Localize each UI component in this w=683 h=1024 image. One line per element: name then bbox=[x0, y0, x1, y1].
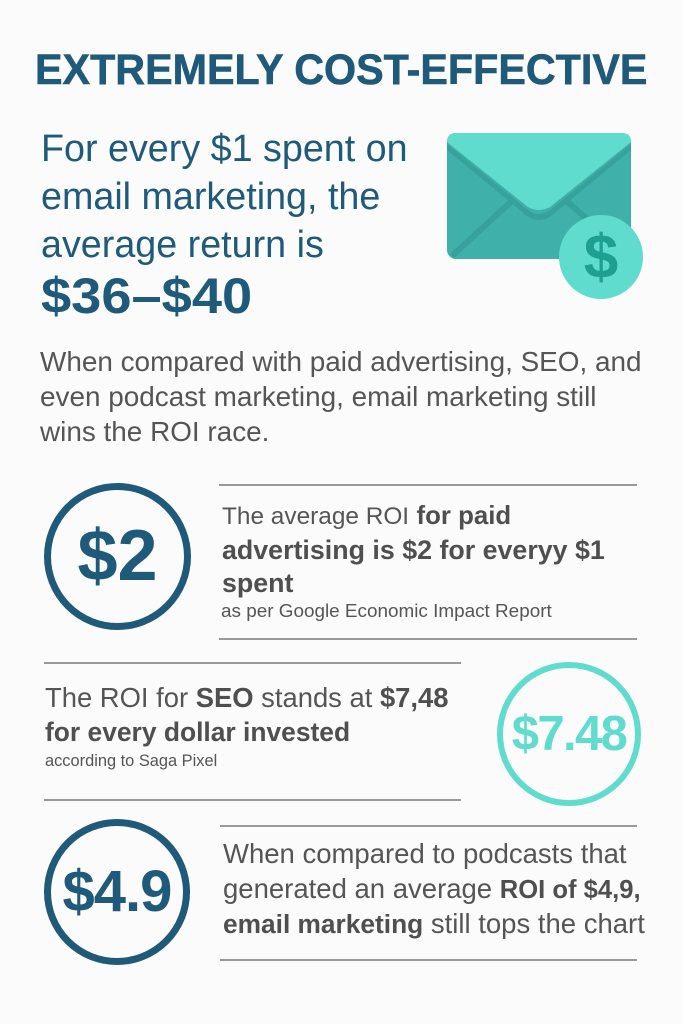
highlighted return range: $36–$40 bbox=[41, 268, 252, 324]
intro statement: email marketing, the bbox=[41, 175, 380, 217]
panel: podcasts bbox=[44, 819, 645, 965]
paragraph: wins the ROI race. bbox=[40, 416, 269, 447]
circle: $7.48 bbox=[497, 662, 641, 806]
text: paid advertising: spent bbox=[222, 568, 293, 598]
panel: paid advertising bbox=[44, 483, 637, 640]
panel: SEO bbox=[44, 662, 641, 806]
circle: $2: $2 bbox=[77, 516, 158, 596]
intro statement bbox=[41, 127, 408, 265]
text: SEO: The ROI for SEO stands at $7,48 bbox=[45, 682, 448, 713]
circle: $4.9 bbox=[44, 819, 190, 965]
circle: $2 bbox=[44, 483, 191, 630]
text: podcasts: email marketing still tops the chart bbox=[223, 908, 645, 939]
text: podcasts bbox=[223, 838, 645, 939]
paragraph bbox=[40, 346, 642, 447]
text: paid advertising: advertising is $2 for everyy $1 bbox=[222, 534, 605, 564]
intro statement: average return is bbox=[41, 223, 324, 265]
intro statement: For every $1 spent on bbox=[41, 127, 408, 169]
source: Google: as per Google Economic Impact Report bbox=[221, 601, 552, 622]
source: Saga Pixel: according to Saga Pixel bbox=[45, 752, 217, 770]
text: podcasts: When compared to podcasts that bbox=[223, 838, 627, 869]
text: SEO: for every dollar invested bbox=[45, 717, 350, 747]
icon: envelope with dollar coin bbox=[447, 133, 643, 299]
paragraph: When compared with paid advertising, SEO, and bbox=[40, 346, 642, 377]
text: podcasts: generated an average ROI of $4,9, bbox=[223, 872, 641, 904]
circle: $7.48: $7.48 bbox=[512, 707, 626, 761]
paragraph: even podcast marketing, email marketing still bbox=[40, 381, 597, 412]
title: EXTREMELY COST-EFFECTIVE bbox=[35, 46, 647, 94]
circle: $4.9: $4.9 bbox=[63, 859, 171, 924]
icon: envelope with dollar coin: $ bbox=[584, 223, 618, 292]
text: SEO bbox=[45, 682, 448, 747]
text: paid advertising: The average ROI for paid bbox=[222, 502, 511, 530]
text: paid advertising bbox=[222, 502, 605, 598]
